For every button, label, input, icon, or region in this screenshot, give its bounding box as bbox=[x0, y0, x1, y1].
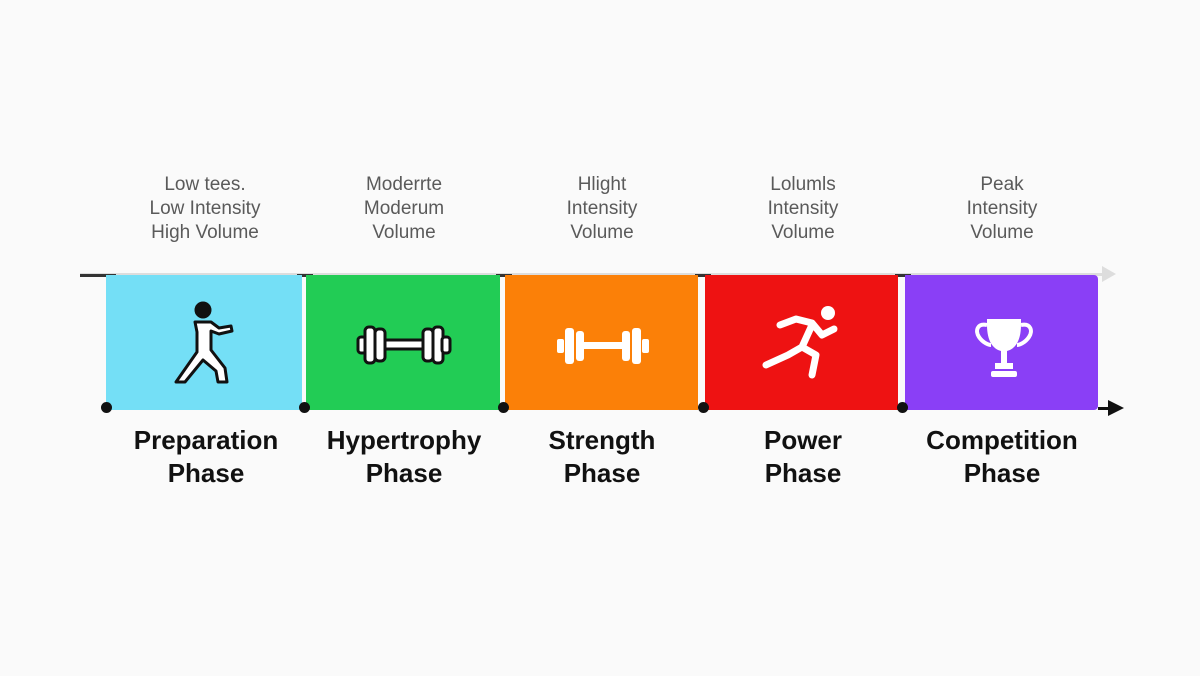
top text: preparation: High Volume bbox=[151, 222, 259, 243]
timeline top line bbox=[80, 273, 1110, 276]
label: competition bbox=[926, 425, 1078, 488]
top text: power bbox=[768, 174, 838, 243]
faint arrowhead top bbox=[1102, 266, 1116, 282]
top text: strength bbox=[567, 174, 638, 243]
top text: preparation: Low tees. bbox=[164, 174, 246, 195]
bottom arrow bbox=[1098, 407, 1112, 410]
top text: power: Intensity bbox=[768, 198, 838, 219]
icon: dumbbell outlined bbox=[356, 326, 452, 364]
top text: hypertrophy: Moderum bbox=[364, 198, 444, 219]
label: preparation: Phase bbox=[168, 458, 244, 488]
label: preparation bbox=[134, 425, 278, 488]
label: power: Power bbox=[764, 425, 842, 455]
top text: strength: Hlight bbox=[578, 174, 626, 195]
icon: runner bbox=[762, 306, 838, 378]
icon: dumbbell bbox=[557, 328, 649, 364]
panel: competition bbox=[905, 275, 1098, 410]
icon: person bbox=[174, 302, 234, 384]
panel: power bbox=[705, 275, 898, 410]
label: strength: Phase bbox=[564, 458, 640, 488]
label: strength bbox=[549, 425, 655, 488]
label: competition: Competition bbox=[926, 425, 1078, 455]
label: hypertrophy bbox=[327, 425, 482, 488]
top text: hypertrophy bbox=[364, 174, 444, 243]
icon: trophy bbox=[975, 319, 1033, 377]
label: competition: Phase bbox=[964, 458, 1040, 488]
top text: strength: Intensity bbox=[567, 198, 637, 219]
panel: preparation bbox=[106, 275, 302, 410]
label: preparation: Preparation bbox=[134, 425, 278, 455]
panel: hypertrophy bbox=[306, 275, 500, 410]
label: strength: Strength bbox=[549, 425, 655, 455]
label: power: Phase bbox=[765, 458, 841, 488]
label: hypertrophy: Phase bbox=[366, 458, 442, 488]
top text: strength: Volume bbox=[570, 222, 634, 243]
top text: power: Volume bbox=[771, 222, 835, 243]
top text: preparation bbox=[150, 174, 260, 243]
top text: competition: Volume bbox=[970, 222, 1034, 243]
top text: hypertrophy: Volume bbox=[372, 222, 436, 243]
top text: competition: Intensity bbox=[967, 198, 1037, 219]
top text: power: Lolumls bbox=[770, 174, 836, 195]
top text: competition bbox=[967, 174, 1038, 243]
panel: strength bbox=[505, 275, 698, 410]
top text: hypertrophy: Moderrte bbox=[366, 174, 442, 195]
label: hypertrophy: Hypertrophy bbox=[327, 425, 481, 455]
label: power bbox=[764, 425, 842, 488]
top text: preparation: Low Intensity bbox=[150, 198, 260, 219]
top text: competition: Peak bbox=[980, 174, 1024, 195]
